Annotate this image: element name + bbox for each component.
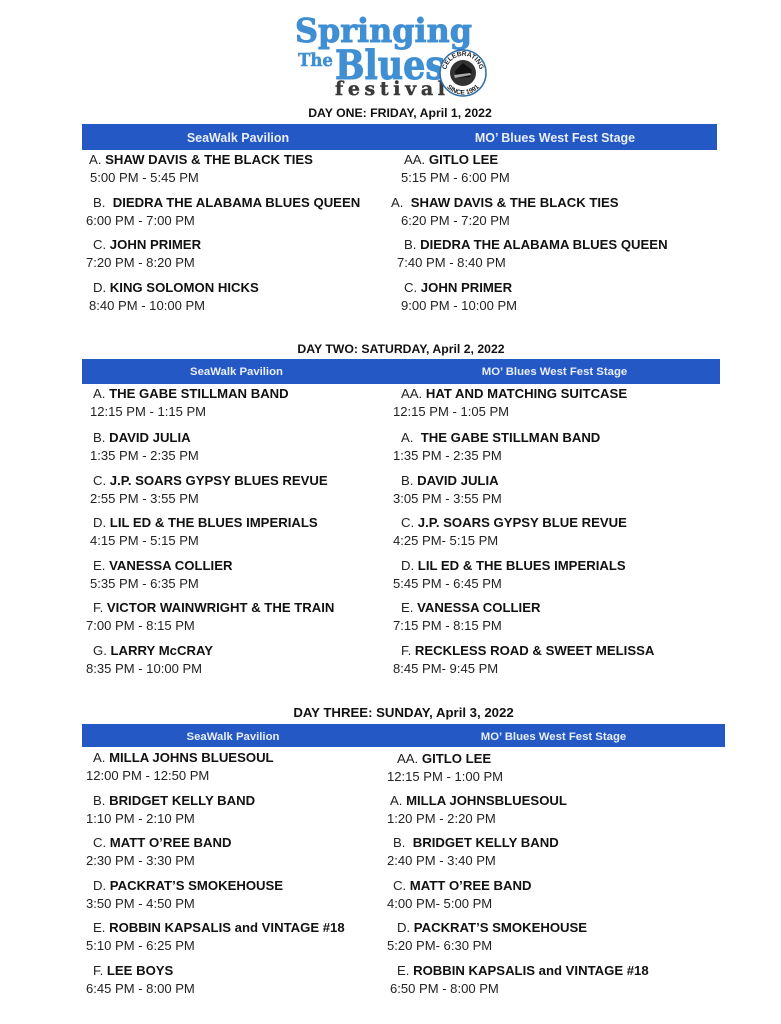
act: Lee Boys, SeaWalk (86, 963, 195, 996)
logo badge (439, 49, 487, 97)
day two section: B. DAVID JULIA (401, 473, 499, 488)
act: David Julia, SeaWalk: 1:35 PM - 2:35 PM (90, 448, 199, 463)
act: Robbin Kapsalis, West Fest (390, 963, 649, 996)
act: Milla Johns, SeaWalk: 12:00 PM - 12:50 PM (86, 768, 209, 783)
act: Victor Wainwright, SeaWalk: F. VICTOR WAINWRIGHT & THE TRAIN (93, 600, 334, 615)
act: Lil Ed, SeaWalk: 4:15 PM - 5:15 PM (90, 533, 199, 548)
act: Gabe Stillman, SeaWalk: 12:15 PM - 1:15 PM (90, 404, 206, 419)
day one section: B. DIEDRA THE ALABAMA BLUES QUEEN (404, 237, 668, 252)
day three section: AA. GITLO LEE (397, 751, 491, 766)
act: Milla Johns, West Fest (387, 793, 567, 826)
day two stage header bar: MO’ Blues West Fest Stage (482, 366, 627, 378)
day one stage header bar: MO’ Blues West Fest Stage (475, 131, 635, 145)
day three section: E. ROBBIN KAPSALIS and VINTAGE #18 (397, 963, 649, 978)
day one section: A. SHAW DAVIS & THE BLACK TIES (391, 195, 619, 210)
act: Bridget Kelly, SeaWalk: B. BRIDGET KELLY BAND (93, 793, 255, 808)
day two section: F. RECKLESS ROAD & SWEET MELISSA (401, 643, 654, 658)
act: J.P. Soars, SeaWalk (90, 473, 328, 506)
day two section: 12:15 PM - 1:05 PM (393, 404, 509, 419)
day two section: A. THE GABE STILLMAN BAND (401, 430, 600, 445)
act: John Primer, SeaWalk: C. JOHN PRIMER (93, 237, 201, 252)
act: Shaw Davis, West Fest (391, 195, 619, 228)
act: Vanessa Collier, SeaWalk: 5:35 PM - 6:35 PM (90, 576, 199, 591)
day two stage header bar (82, 359, 720, 384)
act: Matt O'Ree, West Fest (387, 878, 531, 911)
day one section: 5:15 PM - 6:00 PM (401, 170, 510, 185)
act: Larry McCray, SeaWalk: 8:35 PM - 10:00 PM (86, 661, 202, 676)
act: J.P. Soars, West Fest (393, 515, 627, 548)
act: Lee Boys, SeaWalk: F. LEE BOYS (93, 963, 173, 978)
act: Hat and Matching Suitcase, West Fest (393, 386, 627, 419)
act: David Julia, SeaWalk (90, 430, 199, 463)
act: John Primer, SeaWalk: 7:20 PM - 8:20 PM (86, 255, 195, 270)
act: Lil Ed, SeaWalk: D. LIL ED & THE BLUES IMPERIALS (93, 515, 318, 530)
day two section: 3:05 PM - 3:55 PM (393, 491, 502, 506)
day three section: 4:00 PM- 5:00 PM (387, 896, 492, 911)
act: Gitlo Lee, West Fest (401, 152, 510, 185)
day two stage header bar: SeaWalk Pavilion (190, 366, 283, 378)
day three stage header bar (82, 724, 725, 747)
act: King Solomon Hicks, SeaWalk: D. KING SOLOMON HICKS (93, 280, 259, 295)
act: Matt O'Ree, SeaWalk: C. MATT O’REE BAND (93, 835, 231, 850)
act: Matt O'Ree, SeaWalk: 2:30 PM - 3:30 PM (86, 853, 195, 868)
act: Milla Johns, SeaWalk: A. MILLA JOHNS BLUESOUL (93, 750, 274, 765)
day three section: 1:20 PM - 2:20 PM (387, 811, 496, 826)
logo wordmark: The: The (298, 50, 333, 71)
act: Robbin Kapsalis, SeaWalk: 5:10 PM - 6:25 PM (86, 938, 195, 953)
day one section: C. JOHN PRIMER (404, 280, 512, 295)
act: Milla Johns, SeaWalk (86, 750, 274, 783)
act: Bridget Kelly, SeaWalk (86, 793, 255, 826)
act: Victor Wainwright, SeaWalk (86, 600, 334, 633)
day three stage header bar: SeaWalk Pavilion (187, 731, 279, 743)
act: Robbin Kapsalis, SeaWalk (86, 920, 345, 953)
act: Lil Ed, SeaWalk (90, 515, 318, 548)
act: Vanessa Collier, SeaWalk (90, 558, 232, 591)
day three section: A. MILLA JOHNSBLUESOUL (390, 793, 567, 808)
act: David Julia, SeaWalk: B. DAVID JULIA (93, 430, 191, 445)
act: King Solomon Hicks, SeaWalk (89, 280, 259, 313)
day two section: 1:35 PM - 2:35 PM (393, 448, 502, 463)
day two section: D. LIL ED & THE BLUES IMPERIALS (401, 558, 626, 573)
act: Lee Boys, SeaWalk: 6:45 PM - 8:00 PM (86, 981, 195, 996)
act: Shaw Davis, SeaWalk: 5:00 PM - 5:45 PM (90, 170, 199, 185)
act: Gabe Stillman, SeaWalk: A. THE GABE STILLMAN BAND (93, 386, 289, 401)
act: Gitlo Lee, West Fest (387, 751, 503, 784)
day one section: 7:40 PM - 8:40 PM (397, 255, 506, 270)
day two section (82, 342, 720, 676)
act: Gabe Stillman, West Fest (393, 430, 600, 463)
logo wordmark: festival: festival (335, 78, 445, 100)
logo wordmark: Blues: Blues (335, 42, 445, 89)
day three heading: DAY THREE: SUNDAY, April 3, 2022 (293, 705, 514, 720)
act: Larry McCray, SeaWalk (86, 643, 213, 676)
act: Shaw Davis, SeaWalk (89, 152, 313, 185)
act: Packrat's Smokehouse, SeaWalk: 3:50 PM - 4:50 PM (86, 896, 195, 911)
day three section: 2:40 PM - 3:40 PM (387, 853, 496, 868)
day three section: 6:50 PM - 8:00 PM (390, 981, 499, 996)
day three section: C. MATT O’REE BAND (393, 878, 531, 893)
day three stage header bar: MO’ Blues West Fest Stage (481, 731, 626, 743)
day one stage header bar: SeaWalk Pavilion (187, 131, 289, 145)
act: Victor Wainwright, SeaWalk: 7:00 PM - 8:15 PM (86, 618, 195, 633)
act: Diedra, West Fest (397, 237, 668, 270)
act: J.P. Soars, SeaWalk: 2:55 PM - 3:55 PM (90, 491, 199, 506)
day three section: D. PACKRAT’S SMOKEHOUSE (397, 920, 587, 935)
act: J.P. Soars, SeaWalk: C. J.P. SOARS GYPSY BLUES REVUE (93, 473, 328, 488)
day one stage header bar (82, 124, 717, 150)
act: Packrat's Smokehouse, West Fest (387, 920, 587, 953)
act: Vanessa Collier, West Fest (393, 600, 540, 633)
day two section: 7:15 PM - 8:15 PM (393, 618, 502, 633)
day one section: 9:00 PM - 10:00 PM (401, 298, 517, 313)
act: Diedra, SeaWalk: 6:00 PM - 7:00 PM (86, 213, 195, 228)
act: Robbin Kapsalis, SeaWalk: E. ROBBIN KAPSALIS and VINTAGE #18 (93, 920, 345, 935)
day two heading: DAY TWO: SATURDAY, April 2, 2022 (297, 342, 505, 356)
day two section: 8:45 PM- 9:45 PM (393, 661, 498, 676)
day two section: 5:45 PM - 6:45 PM (393, 576, 502, 591)
logo badge: CELEBRATING (442, 51, 484, 70)
act: King Solomon Hicks, SeaWalk: 8:40 PM - 10:00 PM (89, 298, 205, 313)
act: Diedra, SeaWalk: B. DIEDRA THE ALABAMA BLUES QUEEN (93, 195, 360, 210)
act: David Julia, West Fest (393, 473, 502, 506)
logo wordmark: Springing: Springing (295, 11, 472, 50)
act: Bridget Kelly, West Fest (387, 835, 559, 868)
day one section: AA. GITLO LEE (404, 152, 498, 167)
day one heading: DAY ONE: FRIDAY, April 1, 2022 (308, 106, 492, 120)
day three section: 12:15 PM - 1:00 PM (387, 769, 503, 784)
act: Gabe Stillman, SeaWalk (90, 386, 289, 419)
day two section: AA. HAT AND MATCHING SUITCASE (401, 386, 627, 401)
act: Lil Ed, West Fest (393, 558, 626, 591)
act: Vanessa Collier, SeaWalk: E. VANESSA COLLIER (93, 558, 232, 573)
act: Shaw Davis, SeaWalk: A. SHAW DAVIS & THE BLACK TIES (89, 152, 313, 167)
act: John Primer, SeaWalk (86, 237, 201, 270)
day one section (82, 106, 717, 313)
act: Diedra, SeaWalk (86, 195, 360, 228)
logo badge: SINCE 1991 (447, 84, 480, 95)
day three section: 5:20 PM- 6:30 PM (387, 938, 492, 953)
act: Packrat's Smokehouse, SeaWalk (86, 878, 283, 911)
day two section: 4:25 PM- 5:15 PM (393, 533, 498, 548)
festival logo (295, 11, 487, 100)
day one section: 6:20 PM - 7:20 PM (401, 213, 510, 228)
act: Matt O'Ree, SeaWalk (86, 835, 231, 868)
act: Bridget Kelly, SeaWalk: 1:10 PM - 2:10 PM (86, 811, 195, 826)
day two section: E. VANESSA COLLIER (401, 600, 540, 615)
day two section: C. J.P. SOARS GYPSY BLUE REVUE (401, 515, 627, 530)
act: John Primer, West Fest (401, 280, 517, 313)
act: Larry McCray, SeaWalk: G. LARRY McCRAY (93, 643, 213, 658)
act: Reckless Road, West Fest (393, 643, 654, 676)
day three section: B. BRIDGET KELLY BAND (393, 835, 559, 850)
act: Packrat's Smokehouse, SeaWalk: D. PACKRAT’S SMOKEHOUSE (93, 878, 283, 893)
